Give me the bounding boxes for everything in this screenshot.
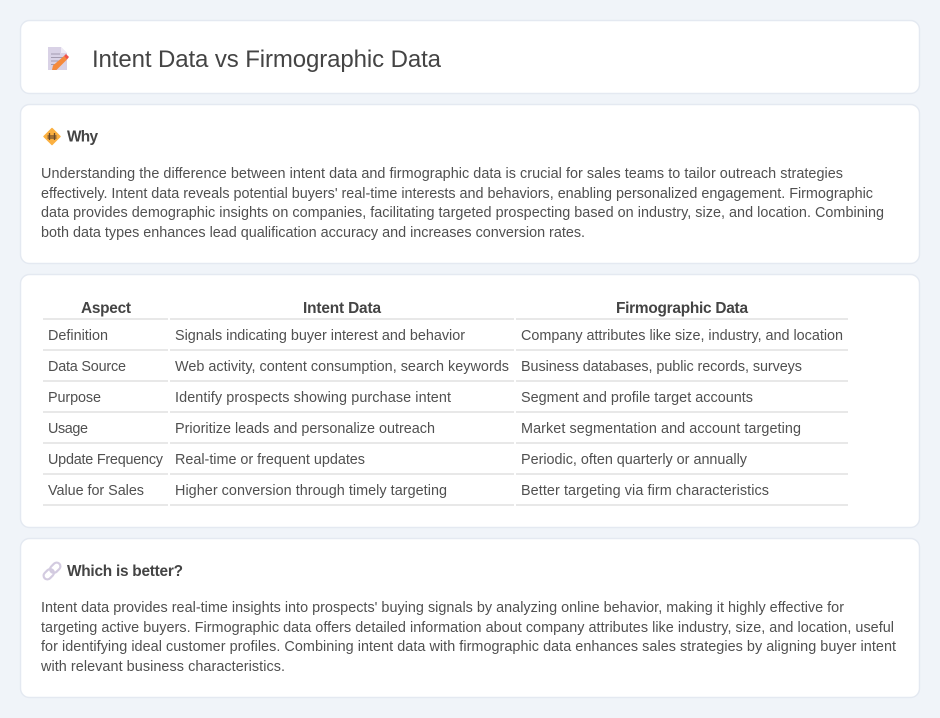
table row: usage [43, 421, 848, 443]
table row: usage: Market segmentation and account targeting [521, 421, 801, 437]
text block: why paragraph [41, 166, 884, 241]
table header row: Aspect [81, 300, 131, 317]
table row: data source [43, 359, 848, 381]
table row: update frequency: Real-time or frequent updates [175, 452, 365, 468]
table row: data source: Business databases, public records, surveys [521, 359, 802, 375]
table row: definition: Definition [48, 328, 108, 344]
text block: why paragraph: Understanding the difference between intent data and firmographic data is crucial for sales teams to tailor outreach strategies [41, 166, 843, 182]
title: Intent Data vs Firmographic Data [92, 46, 442, 73]
table row: update frequency: Periodic, often quarterly or annually [521, 452, 748, 468]
table row: definition [43, 328, 848, 350]
panel: title header [20, 20, 920, 94]
table row: definition: Company attributes like size, industry, and location [521, 328, 843, 344]
table row: data source: Data Source [48, 359, 126, 375]
table row: value for sales [43, 483, 848, 505]
text block: why paragraph: both data types enhances lead qualification accuracy and increases conversion rates. [41, 225, 585, 241]
table row: usage: Usage [48, 421, 88, 437]
table row: purpose: Segment and profile target accounts [521, 390, 753, 406]
icon: chain link [42, 561, 62, 581]
table row: update frequency [43, 452, 848, 474]
heading: which is better: Which is better? [67, 563, 183, 580]
table row: definition: Signals indicating buyer interest and behavior [175, 328, 465, 344]
icon: document with pencil [48, 47, 69, 70]
table row: value for sales: Value for Sales [48, 483, 144, 499]
text block: which is better paragraph: with relevant business characteristics. [40, 659, 285, 675]
table row: update frequency: Update Frequency [48, 452, 164, 468]
table row: data source: Web activity, content consumption, search keywords [175, 359, 509, 375]
table row: value for sales: Higher conversion through timely targeting [175, 483, 447, 499]
text block: which is better paragraph: for identifying ideal customer profiles. Combining intent data with firmographic data enhances sales strategies by aligning buyer intent [41, 639, 896, 655]
table header row: Intent Data [303, 300, 381, 317]
icon: orange diamond sign [44, 128, 60, 144]
text block: why paragraph: effectively. Intent data reveals potential buyers' real-time interests and behaviors, enabling personalized engagement. Firmographic [41, 186, 873, 202]
heading: why: Why [67, 128, 98, 146]
table row: value for sales: Better targeting via firm characteristics [521, 483, 769, 499]
table header row [43, 300, 848, 319]
table row: usage: Prioritize leads and personalize outreach [175, 421, 435, 437]
table header row: Firmographic Data [616, 300, 748, 317]
text block: which is better paragraph [40, 600, 896, 675]
panel: which is better [20, 538, 920, 698]
panel: why [20, 104, 920, 264]
text block: why paragraph: data provides demographic insights on companies, facilitating targeted prospecting based on industry, size, and location. Combining [41, 205, 884, 221]
table row: purpose: Purpose [48, 390, 101, 406]
table row: purpose: Identify prospects showing purchase intent [175, 390, 451, 406]
panel: comparison table [20, 274, 920, 528]
text block: which is better paragraph: Intent data provides real-time insights into prospects' buying signals by analyzing online behavior, making it highly effective for [41, 600, 844, 616]
table row: purpose [43, 390, 848, 412]
text block: which is better paragraph: targeting active buyers. Firmographic data offers detailed information about company attributes like industry, size, and location, useful [41, 620, 894, 636]
